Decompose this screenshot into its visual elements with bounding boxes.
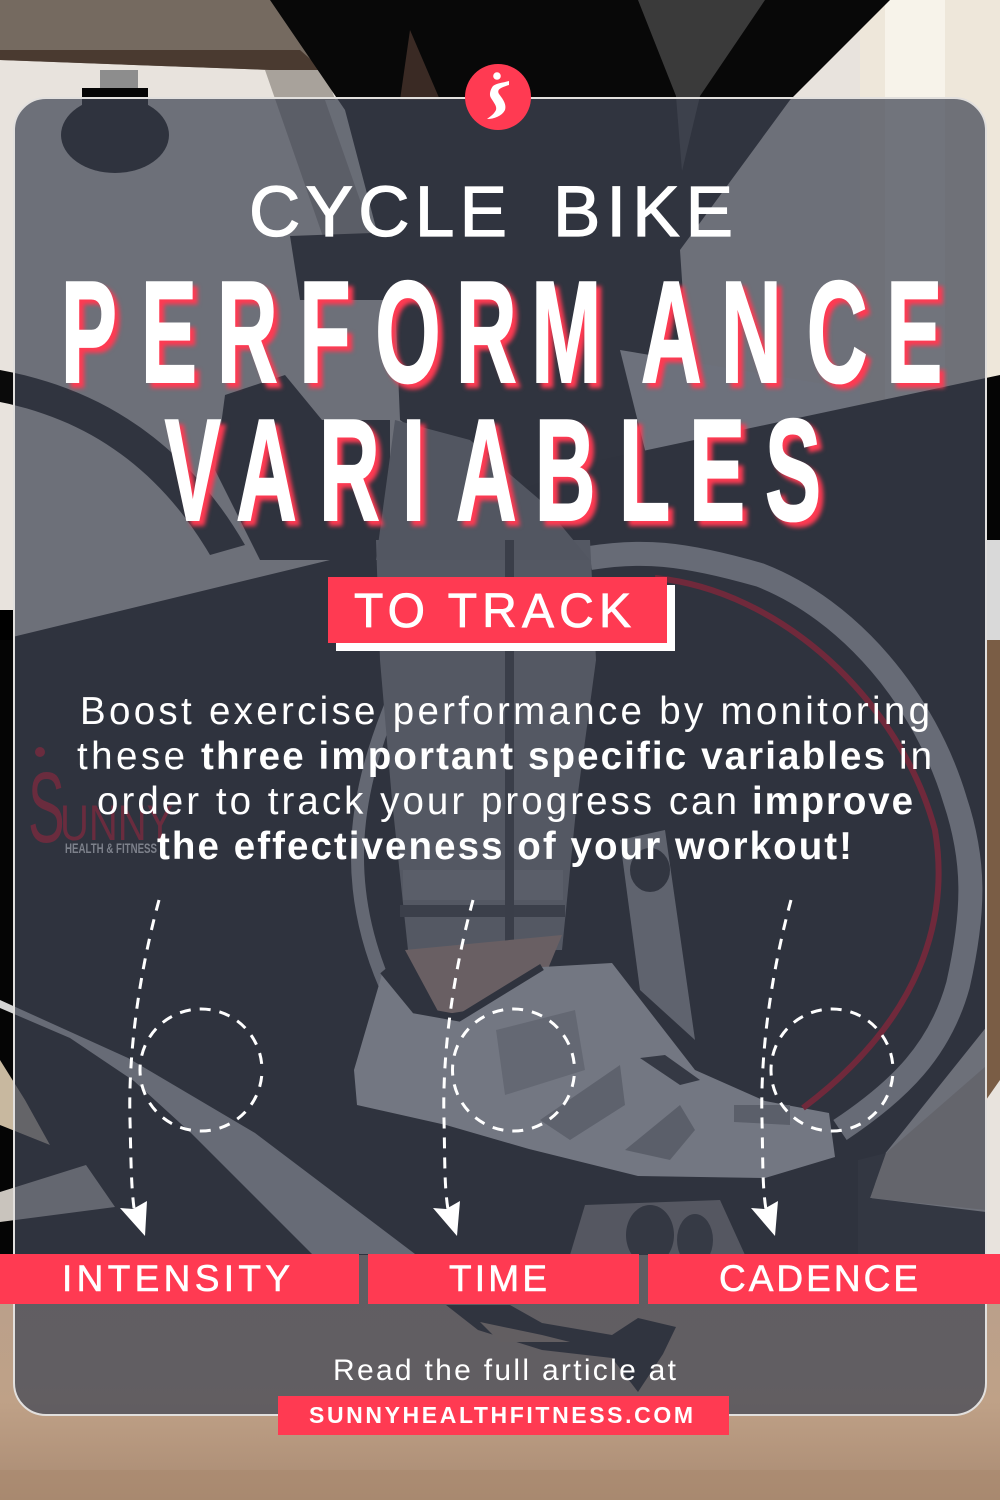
dashed arrow and circle: cadence: [751, 900, 893, 1236]
title line: cycle bike: [249, 173, 733, 252]
label bar: time: [368, 1254, 639, 1304]
intro paragraph: these: [77, 735, 185, 778]
website link badge: [278, 1396, 729, 1435]
tag: to track: TO TRACK: [354, 585, 631, 638]
bike brand mark in photo: HEALTH & FITNESS: [65, 840, 157, 856]
main title: performance variables: [61, 252, 942, 552]
title word: performance: PERFORMANCE: [61, 252, 942, 414]
label bar: time: TIME: [449, 1258, 547, 1299]
bike brand mark in photo: S: [28, 753, 65, 864]
bike brand mark in photo: UNNY: [60, 795, 173, 851]
dashed arrow and circle: time: [433, 900, 574, 1236]
title line: cycle bike: BIKE: [553, 173, 733, 252]
title word: variables: VARIABLES: [165, 390, 821, 552]
intro paragraph: in: [899, 735, 932, 778]
dashed arrow and circle: intensity: [120, 900, 262, 1236]
website link badge: SUNNYHEALTHFITNESS.COM: [309, 1402, 693, 1428]
label bar: intensity: [0, 1254, 359, 1304]
label bar: cadence: CADENCE: [719, 1258, 918, 1299]
intro paragraph: [77, 690, 932, 868]
intro paragraph: improve: [752, 780, 913, 823]
intro paragraph: order to track your progress can: [97, 780, 737, 823]
flywheel red rim line: [655, 578, 939, 1108]
intro paragraph: three important specific variables: [201, 735, 885, 778]
footer line: Read the full article at: [333, 1354, 677, 1387]
logo badge: [465, 64, 531, 130]
bike brand mark in photo: [28, 747, 173, 864]
label bar: intensity: INTENSITY: [62, 1258, 290, 1299]
tag: to track: [328, 577, 675, 651]
title line: cycle bike: CYCLE: [249, 173, 507, 252]
label bar: cadence: [648, 1254, 1000, 1304]
intro paragraph: the effectiveness of your workout!: [157, 825, 852, 868]
intro paragraph: Boost exercise performance by monitoring: [80, 690, 930, 733]
